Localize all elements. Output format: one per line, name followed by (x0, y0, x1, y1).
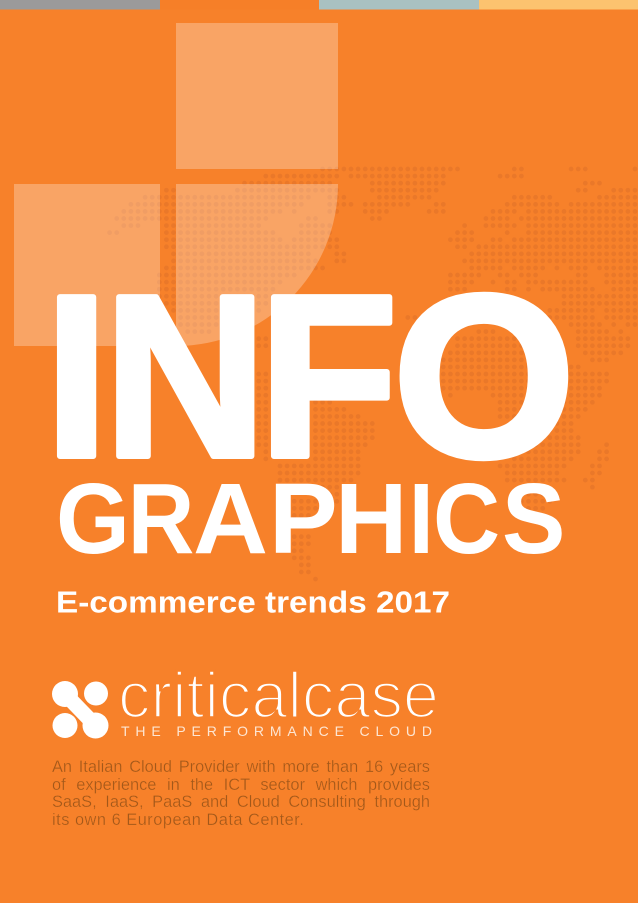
title: GRAPHICS: I (409, 464, 434, 575)
title: GRAPHICS: H (335, 463, 407, 575)
title: GRAPHICS: G (56, 463, 130, 575)
company description (52, 758, 430, 829)
logo tagline: THE PERFORMANCE CLOUD (121, 723, 432, 739)
title: GRAPHICS: R (128, 464, 194, 575)
title: INFO: O (393, 248, 575, 506)
title: INFO: I (44, 247, 109, 505)
company description: of experience in the ICT sector which provides (52, 776, 430, 794)
title: GRAPHICS: S (502, 463, 565, 575)
decorative square: left (14, 184, 160, 346)
logo wordmark: criticalcase (118, 658, 439, 732)
decorative quarter circle (176, 184, 338, 346)
title: GRAPHICS (56, 462, 565, 575)
title: GRAPHICS: C (433, 464, 500, 575)
company description: its own 6 European Data Center. (52, 811, 304, 829)
decorative square: top (176, 23, 338, 169)
title: INFO: F (259, 246, 398, 505)
title: GRAPHICS: P (269, 462, 338, 575)
company description: SaaS, IaaS, PaaS and Cloud Consulting through (52, 793, 430, 811)
title: GRAPHICS: A (193, 463, 268, 575)
subtitle: E-commerce trends 2017 (56, 584, 450, 620)
company description: An Italian Cloud Provider with more than 16 years (52, 758, 430, 776)
logo icon (52, 681, 108, 738)
dotted world map (110, 169, 635, 579)
top colour bar (0, 0, 638, 10)
title: INFO: N (104, 247, 267, 506)
title: INFO (44, 246, 575, 506)
